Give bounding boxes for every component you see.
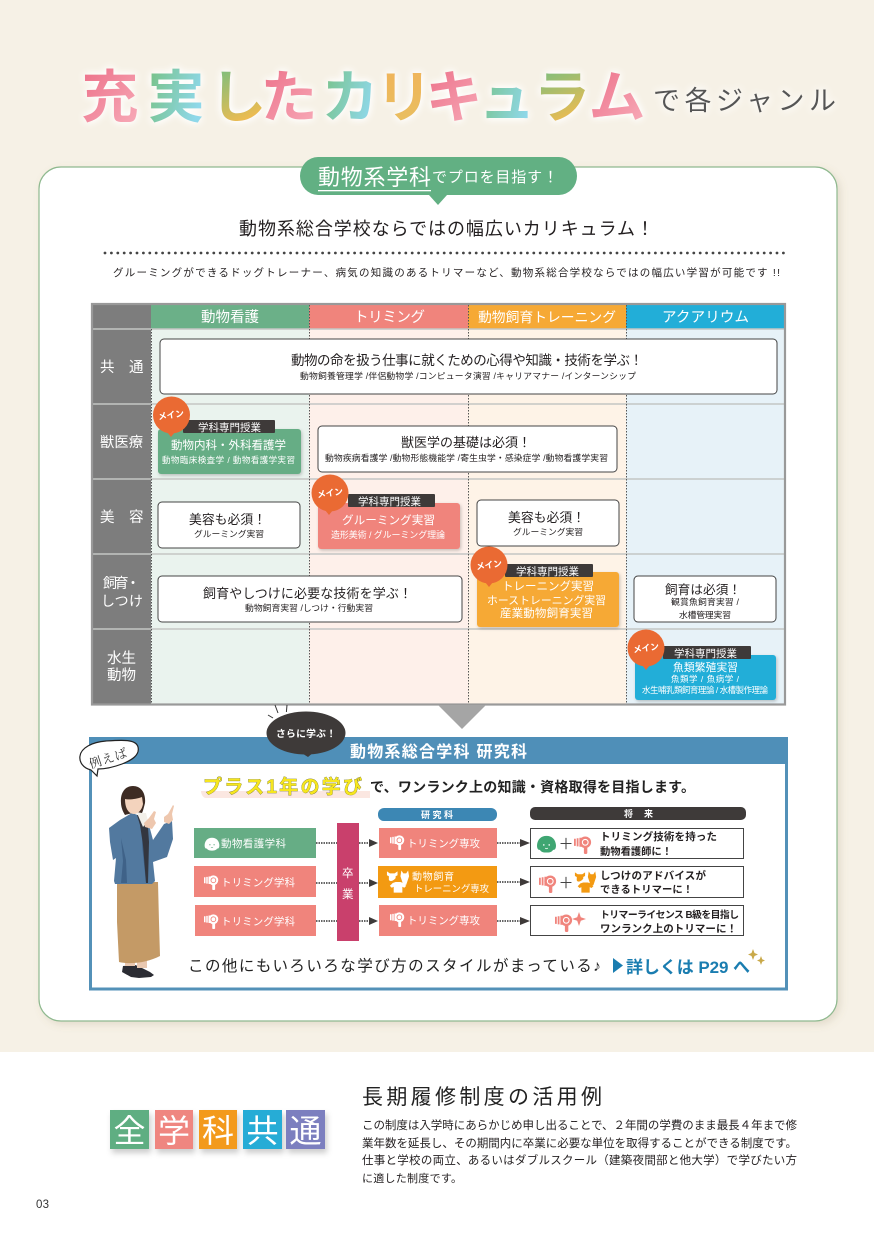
row labels: 飼育・ bbox=[103, 575, 140, 591]
box: common bbox=[160, 339, 777, 394]
title bbox=[82, 66, 836, 130]
major: trimming 2 bbox=[379, 905, 497, 936]
future: nurse: トリミング技術を持った bbox=[600, 830, 717, 843]
box: beauty left: 美容も必須！ bbox=[189, 512, 266, 527]
department: nursing bbox=[194, 828, 316, 858]
speech bubble: for example bbox=[80, 740, 138, 776]
heading pill bbox=[300, 157, 577, 205]
department: trimming 1: トリミング学科 bbox=[221, 876, 296, 889]
column label: future: 来 bbox=[644, 808, 653, 819]
box: aquatic main: 水生哺乳類飼育理論 / 水槽製作理論 bbox=[642, 685, 769, 695]
title: ュ bbox=[478, 66, 536, 130]
box: nursing main: 学科専門授業 bbox=[198, 421, 262, 434]
box: nursing main: メイン bbox=[157, 408, 185, 422]
box: training main: トレーニング実習 bbox=[502, 579, 594, 593]
speech bubble: further study: さらに学ぶ！ bbox=[276, 727, 336, 740]
box: beauty right: グルーミング実習 bbox=[513, 526, 583, 537]
curriculum table bbox=[92, 304, 785, 704]
future: license: トリマーライセンス B級を目指し bbox=[600, 908, 739, 921]
graduation bar bbox=[337, 823, 359, 941]
row labels: 共 bbox=[100, 359, 114, 376]
title: カ bbox=[322, 66, 378, 130]
box: aquarium breeding bbox=[634, 576, 776, 622]
table header bbox=[93, 305, 784, 329]
long-term enrolment text: 仕事と学校の両立、あるいはダブルスクール（建築夜間部と他大学）で学びたい方 bbox=[362, 1153, 797, 1167]
all departments tiles: 全 bbox=[113, 1113, 146, 1149]
row labels: 美 bbox=[100, 509, 115, 526]
box: nursing main: 動物内科・外科看護学 bbox=[171, 438, 286, 452]
title: 充 bbox=[82, 66, 138, 130]
major: training: トレーニング専攻 bbox=[414, 883, 490, 894]
box: veterinary basics bbox=[318, 426, 617, 472]
box: aquatic main: 魚類学 / 魚病学 / bbox=[671, 674, 740, 684]
box: aquatic main: 魚類繁殖実習 bbox=[673, 661, 738, 674]
all departments tiles: 学 bbox=[158, 1113, 190, 1149]
table header: 動物看護 bbox=[201, 309, 260, 326]
long-term enrolment text: この制度は入学時にあらかじめ申し出ることで、２年間の学費のまま最長４年まで修 bbox=[362, 1118, 798, 1132]
shoes bbox=[122, 965, 154, 978]
column label: future bbox=[530, 807, 746, 820]
title: し bbox=[210, 66, 266, 130]
box: aquatic main: 学科専門授業 bbox=[674, 647, 738, 660]
student photo illustration bbox=[109, 786, 174, 978]
long-term enrolment heading: 長期履修制度の活用例 bbox=[362, 1086, 602, 1109]
box: beauty left bbox=[158, 502, 300, 548]
future: advice bbox=[530, 866, 744, 898]
box: beauty right: 美容も必須！ bbox=[508, 510, 585, 525]
department: trimming 2: トリミング学科 bbox=[221, 915, 296, 928]
row labels bbox=[93, 329, 151, 704]
box: grooming main: 造形美術 / グルーミング理論 bbox=[331, 529, 445, 540]
graduation bar: 業 bbox=[342, 888, 354, 901]
face and hair bbox=[121, 786, 145, 815]
major: training: 動物飼育 bbox=[412, 870, 454, 883]
row labels: 獣医療 bbox=[100, 434, 143, 451]
row labels: 動物 bbox=[107, 667, 136, 684]
long-term enrolment text bbox=[362, 1118, 798, 1185]
department: trimming 1 bbox=[194, 866, 316, 897]
headline bbox=[201, 775, 695, 798]
box: nursing main bbox=[153, 396, 301, 474]
row labels: 通 bbox=[129, 359, 144, 376]
box: aquatic main bbox=[628, 630, 776, 700]
box: aquarium breeding: 飼育は必須！ bbox=[665, 582, 741, 597]
flow connectors bbox=[316, 839, 530, 925]
skirt bbox=[117, 882, 160, 963]
link to page 29: 詳しくは P29 へ bbox=[626, 957, 750, 977]
icon: sparkles bbox=[748, 949, 765, 965]
row labels: しつけ bbox=[101, 593, 143, 609]
long-term enrolment text: 業年数を延長し、その期間内に卒業に必要な単位を取得することができる制度です。 bbox=[362, 1136, 797, 1150]
table header: トリミング bbox=[354, 309, 425, 326]
closing line: この他にもいろいろな学び方のスタイルがまっている♪ bbox=[188, 957, 601, 975]
box: training main: 産業動物飼育実習 bbox=[500, 606, 593, 620]
box: training main bbox=[470, 546, 619, 627]
column label: research: 研究科 bbox=[421, 809, 453, 820]
box: beauty right bbox=[477, 500, 619, 546]
speech bubble: further study bbox=[266, 705, 346, 757]
box: grooming main: 学科専門授業 bbox=[358, 495, 422, 508]
column label: research bbox=[378, 808, 497, 821]
intro text: グルーミングができるドッグトレーナー、病気の知識のあるトリマーなど、動物系総合学校ならではの幅広い学習が可能です !! bbox=[113, 266, 780, 279]
all departments tiles: 科 bbox=[202, 1113, 234, 1149]
future: license bbox=[530, 906, 744, 936]
box: common: 動物飼養管理学 /伴侶動物学 /コンピュータ演習 /キャリアマナー /インターンシップ bbox=[300, 370, 636, 381]
box: nursing main: 動物臨床検査学 / 動物看護学実習 bbox=[162, 455, 295, 465]
future: nurse: ＋ bbox=[558, 836, 574, 853]
column backgrounds bbox=[151, 329, 784, 704]
box: common: 動物の命を扱う仕事に就くための心得や知識・技術を学ぶ！ bbox=[291, 352, 643, 368]
box: breeding: 飼育やしつけに必要な技術を学ぶ！ bbox=[203, 586, 412, 601]
table header: 動物飼育トレーニング bbox=[478, 310, 616, 325]
heading pill: でプロを目指す！ bbox=[432, 169, 558, 186]
box: grooming main: グルーミング実習 bbox=[342, 513, 435, 527]
box: training main: メイン bbox=[475, 558, 503, 572]
row labels: 水生 bbox=[107, 650, 136, 667]
future: advice: ＋ bbox=[558, 875, 574, 892]
row labels: 容 bbox=[129, 509, 144, 526]
title: リ bbox=[376, 66, 432, 130]
title: ラ bbox=[534, 66, 590, 130]
major: trimming 1 bbox=[379, 828, 497, 858]
future: advice: できるトリマーに！ bbox=[600, 884, 693, 896]
table header: アクアリウム bbox=[662, 309, 749, 326]
future: license: ワンランク上のトリマーに！ bbox=[600, 922, 737, 935]
title: ム bbox=[588, 66, 646, 130]
long-term enrolment text: に適した制度です。 bbox=[362, 1171, 462, 1185]
box: grooming main bbox=[312, 474, 460, 549]
box: aquarium breeding: 観賞魚飼育実習 / bbox=[671, 596, 740, 607]
future: advice: しつけのアドバイスが bbox=[600, 869, 706, 882]
jacket bbox=[109, 813, 173, 884]
box: grooming main: メイン bbox=[316, 486, 344, 500]
box: beauty left: グルーミング実習 bbox=[194, 528, 264, 539]
box: breeding: 動物飼育実習 /しつけ・行動実習 bbox=[245, 602, 373, 613]
department: nursing: 動物看護学科 bbox=[221, 837, 286, 850]
future: nurse: 動物看護師に！ bbox=[600, 845, 672, 858]
all departments tiles: 共 bbox=[246, 1113, 279, 1149]
major: trimming 1: トリミング専攻 bbox=[407, 837, 480, 850]
research course panel bbox=[80, 705, 788, 989]
title: で各ジャンル bbox=[653, 86, 836, 116]
research course panel: 動物系総合学科 研究科 bbox=[350, 742, 527, 761]
department: trimming 2 bbox=[195, 905, 316, 936]
box: breeding bbox=[158, 576, 462, 622]
all departments tiles bbox=[110, 1110, 325, 1149]
section heading: 動物系総合学校ならではの幅広いカリキュラム！ bbox=[239, 219, 654, 239]
graduation bar: 卒 bbox=[342, 867, 354, 880]
all departments tiles: 通 bbox=[289, 1113, 322, 1149]
arrow: table to research course bbox=[438, 705, 486, 729]
box: training main: 学科専門授業 bbox=[516, 565, 580, 578]
major: trimming 2: トリミング専攻 bbox=[407, 914, 480, 927]
future: nurse bbox=[530, 828, 744, 858]
speech bubble: for example: 例えば bbox=[86, 743, 130, 772]
page number: 03 bbox=[36, 1199, 49, 1211]
title: た bbox=[260, 66, 318, 130]
heading pill: 動物系学科 bbox=[318, 165, 431, 190]
hands bbox=[144, 811, 156, 829]
box: aquatic main: メイン bbox=[632, 641, 660, 655]
box: veterinary basics: 動物疾病看護学 /動物形態機能学 /寄生虫学・感染症学 /動物看護学実習 bbox=[325, 452, 608, 463]
column label: future: 将 bbox=[624, 808, 633, 819]
box: aquarium breeding: 水槽管理実習 bbox=[679, 609, 731, 620]
box: training main: ホーストレーニング実習 bbox=[487, 593, 606, 607]
main white card bbox=[39, 167, 837, 1021]
headline: で、ワンランク上の知識・資格取得を目指します。 bbox=[370, 779, 695, 795]
headline: プラス1年の学び bbox=[203, 775, 362, 798]
legs bbox=[125, 958, 135, 966]
title: 実 bbox=[148, 66, 204, 130]
title: キ bbox=[426, 66, 482, 130]
major: training bbox=[378, 866, 497, 898]
box: veterinary basics: 獣医学の基礎は必須！ bbox=[401, 435, 531, 450]
